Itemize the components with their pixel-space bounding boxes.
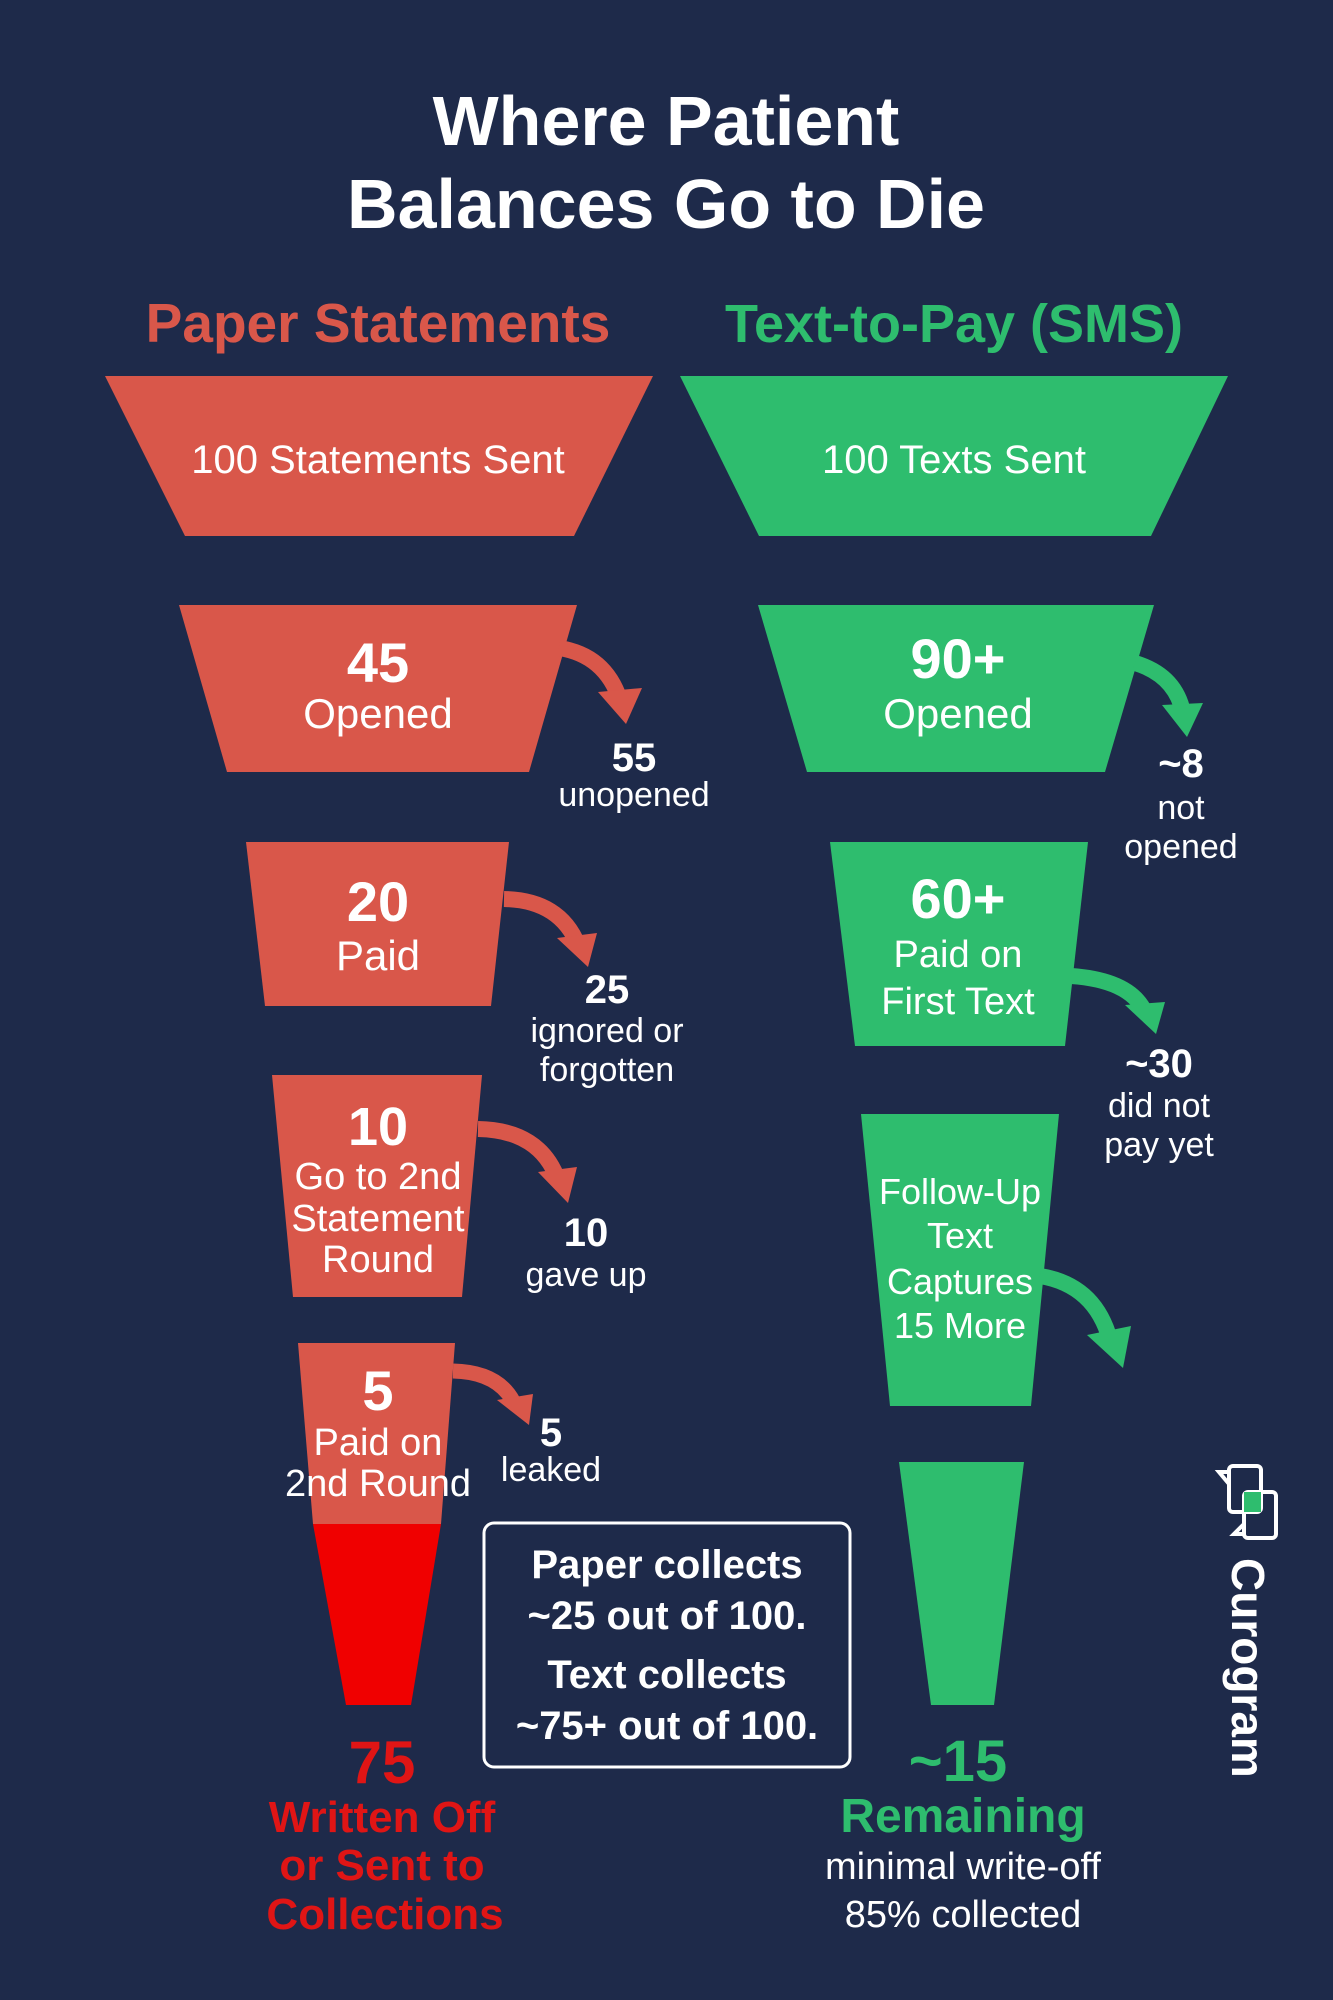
- funnel stage: 90+ opened: [758, 605, 1154, 772]
- icon: curogram logo: [1219, 1466, 1276, 1538]
- funnel stage: follow-up text: 15 More: [894, 1305, 1026, 1346]
- callout box: ~25 out of 100.: [528, 1594, 806, 1638]
- title: [347, 82, 985, 243]
- result: text remaining: minimal write-off: [825, 1846, 1101, 1888]
- result: paper written off: or Sent to: [279, 1841, 485, 1890]
- funnel stage: follow-up text: Text: [927, 1215, 993, 1256]
- funnel stage: 5 paid on 2nd round: 2nd Round: [285, 1463, 471, 1505]
- callout box: Paper collects: [531, 1543, 803, 1587]
- funnel stage: 100 texts sent: 100 Texts Sent: [822, 438, 1086, 482]
- funnel stage: 45 opened: [179, 605, 577, 772]
- arrow: 30 did not pay: [1071, 976, 1165, 1034]
- label: ~30 did not pay yet: ~30: [1125, 1042, 1193, 1086]
- title: Where Patient: [433, 82, 899, 160]
- title: Balances Go to Die: [347, 165, 985, 243]
- funnel stage: 60+ paid on first text: Paid on: [894, 934, 1022, 976]
- funnel stage: 60+ paid on first text: [830, 842, 1088, 1046]
- funnel stage: 5 paid on 2nd round: Paid on: [314, 1422, 442, 1464]
- label: 25 ignored: forgotten: [540, 1051, 674, 1089]
- funnel stage: 45 opened: Opened: [303, 690, 453, 737]
- result: paper written off: [266, 1729, 504, 1939]
- funnel stage: 100 statements sent: [105, 376, 653, 536]
- funnel stage: 5 paid on 2nd round: [285, 1343, 471, 1705]
- result: text remaining: ~15: [909, 1729, 1007, 1794]
- funnel stage: 90+ opened: Opened: [883, 690, 1033, 737]
- label: 5 leaked: 5: [540, 1411, 562, 1455]
- arrow: follow-up: [1040, 1276, 1131, 1368]
- label: ~30 did not pay yet: [1104, 1042, 1214, 1164]
- funnel stage: 45 opened: 45: [347, 631, 409, 694]
- label: 25 ignored: [530, 968, 684, 1089]
- panel: text funnel: [680, 376, 1228, 1705]
- funnel stage: 90+ opened: 90+: [910, 627, 1006, 690]
- heading: text-to-pay: Text-to-Pay (SMS): [725, 294, 1183, 354]
- result: text remaining: 85% collected: [845, 1894, 1081, 1936]
- funnel stage: 100 statements sent: 100 Statements Sent: [191, 438, 565, 482]
- label: 10 gave up: gave up: [526, 1256, 646, 1294]
- funnel stage: 100 texts sent: [680, 376, 1228, 536]
- funnel stage: remaining: [899, 1462, 1024, 1705]
- label: 25 ignored: 25: [585, 968, 629, 1012]
- label: 55 unopened: 55: [612, 736, 656, 780]
- funnel stage: follow-up text: Captures: [887, 1261, 1033, 1302]
- callout box: [484, 1523, 850, 1767]
- label: ~30 did not pay yet: did not: [1108, 1087, 1211, 1125]
- label: ~8 not opened: not: [1157, 789, 1205, 827]
- funnel stage: 60+ paid on first text: First Text: [881, 981, 1035, 1023]
- label: 55 unopened: unopened: [558, 776, 710, 814]
- label: ~30 did not pay yet: pay yet: [1104, 1126, 1214, 1164]
- heading: paper statements: Paper Statements: [146, 292, 610, 354]
- funnel stage: 10 second round: Round: [322, 1239, 434, 1281]
- label: ~8 not opened: ~8: [1158, 742, 1204, 786]
- funnel stage: 20 paid: [246, 842, 509, 1006]
- funnel stage: follow-up text: Follow-Up: [879, 1171, 1041, 1212]
- result: paper written off: Written Off: [269, 1793, 496, 1842]
- result: text remaining: Remaining: [840, 1790, 1086, 1843]
- callout box: ~75+ out of 100.: [516, 1704, 818, 1748]
- label: ~8 not opened: [1124, 742, 1238, 866]
- arrow: 10 gave up: [478, 1129, 577, 1203]
- funnel stage: 20 paid: 20: [347, 870, 409, 933]
- arrow: 8 not opened: [1135, 663, 1203, 737]
- arrow: 25 ignored: [504, 899, 597, 967]
- label: 10 gave up: 10: [564, 1211, 608, 1255]
- arrow: 5 leaked: [453, 1371, 533, 1425]
- funnel stage: 60+ paid on first text: 60+: [910, 867, 1006, 930]
- funnel stage: 20 paid: Paid: [336, 932, 420, 979]
- label: 10 gave up: [526, 1211, 646, 1294]
- funnel stage: 10 second round: Statement: [291, 1198, 465, 1240]
- callout box: Text collects: [547, 1653, 787, 1697]
- label: 5 leaked: [501, 1411, 601, 1489]
- result: text remaining: [825, 1729, 1101, 1936]
- label: 5 leaked: leaked: [501, 1451, 601, 1489]
- label: 55 unopened: [558, 736, 710, 814]
- result: paper written off: Collections: [266, 1890, 504, 1939]
- brand: Curogram: Curogram: [1222, 1558, 1274, 1778]
- funnel stage: follow-up text: [861, 1114, 1059, 1406]
- result: paper written off: 75: [349, 1729, 415, 1796]
- funnel stage: 10 second round: Go to 2nd: [295, 1156, 461, 1198]
- funnel stage: 5 paid on 2nd round: 5: [362, 1359, 394, 1422]
- funnel stage: 10 second round: 10: [348, 1097, 408, 1157]
- label: 25 ignored: ignored or: [530, 1012, 684, 1050]
- label: ~8 not opened: opened: [1124, 828, 1238, 866]
- arrow: 55 unopened: [559, 648, 642, 724]
- funnel stage: 10 second round: [272, 1075, 482, 1297]
- panel: paper funnel: [105, 376, 653, 1705]
